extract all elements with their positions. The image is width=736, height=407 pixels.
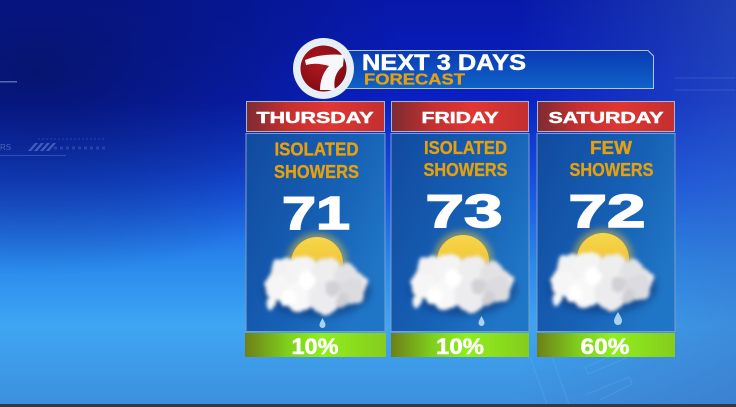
heading: next 3 days: NEXT 3 DAYS: [362, 50, 526, 75]
precipitation chance: 60%: [580, 334, 630, 359]
panel: thursday: [245, 102, 386, 359]
icon: sun behind cloud with raindrop: [263, 233, 371, 328]
panel: saturday: [537, 102, 675, 359]
background: RS: [0, 143, 11, 152]
panel: friday: [391, 102, 529, 359]
precipitation chance: [391, 333, 529, 359]
icon: sun behind cloud with raindrop: [549, 229, 657, 325]
condition text: ISOLATED: [424, 138, 507, 158]
precipitation chance: 10%: [292, 334, 338, 359]
logo: channel 7: [293, 38, 354, 99]
condition text: SHOWERS: [570, 160, 654, 180]
forecast card: [537, 134, 675, 332]
precipitation chance: [537, 333, 675, 359]
forecast card: [246, 134, 385, 332]
condition text: SHOWERS: [424, 160, 508, 180]
day header: FRIDAY: [422, 110, 499, 127]
precipitation chance: [245, 333, 386, 359]
temperature: 72: [568, 185, 646, 237]
condition text: SHOWERS: [274, 162, 359, 182]
subheading: forecast: FORECAST: [364, 72, 466, 88]
day header: [392, 102, 528, 132]
day header: [246, 102, 384, 132]
condition text: ISOLATED: [274, 140, 358, 160]
condition text: [424, 138, 508, 180]
condition text: FEW: [590, 138, 632, 158]
temperature: 71: [282, 187, 350, 239]
title banner: [315, 50, 654, 88]
day header: SATURDAY: [548, 110, 664, 127]
forecast card: [391, 134, 529, 332]
precipitation chance: 10%: [436, 334, 484, 359]
temperature: 73: [426, 185, 502, 237]
day header: THURSDAY: [256, 110, 374, 127]
condition text: [570, 138, 654, 180]
icon: sun behind cloud with raindrop: [409, 231, 517, 326]
condition text: [274, 140, 359, 182]
day header: [538, 102, 674, 132]
